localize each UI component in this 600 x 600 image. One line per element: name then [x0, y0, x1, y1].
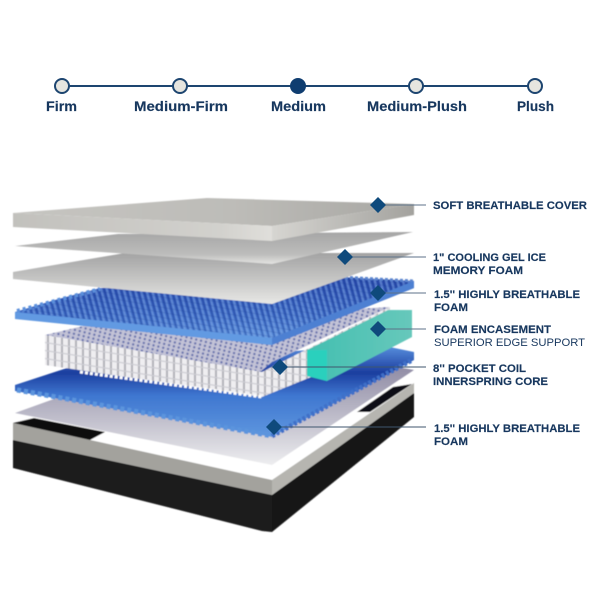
cover right side [272, 204, 414, 241]
label: foam encasement: SUPERIOR EDGE SUPPORT [434, 337, 585, 349]
base black side [13, 440, 272, 532]
label: pocket coil innerspring core: 8'' POCKET COIL [433, 363, 526, 375]
leader: breathable foam lower [266, 419, 426, 435]
sheet 2 [15, 232, 413, 264]
label: highly breathable foam lower: FOAM [434, 436, 468, 448]
upper foam left back teeth [17, 289, 100, 311]
leader: breathable foam upper [370, 285, 426, 301]
lower foam teeth right [272, 360, 412, 436]
label: foam encasement [434, 324, 585, 349]
upper blue foam [15, 277, 414, 345]
scale stop: Plush [528, 79, 542, 93]
upper foam surface [15, 277, 414, 345]
lower foam surface [15, 345, 414, 437]
pocket coil core [45, 307, 390, 397]
cover top [13, 198, 414, 226]
base black recess left [13, 418, 105, 441]
base gray band right side [272, 383, 414, 495]
scale stop: Firm [55, 79, 69, 93]
label: cooling gel ice memory foam: MEMORY FOAM [433, 265, 523, 277]
label: Medium-Plush: Medium-Plush [367, 99, 467, 114]
label: highly breathable foam upper [434, 289, 580, 314]
label: pocket coil innerspring core [433, 363, 548, 388]
label: cooling gel ice memory foam: 1" COOLING GEL ICE [433, 252, 546, 264]
foam encasement block [307, 310, 412, 381]
label: highly breathable foam upper: FOAM [434, 302, 468, 314]
base gray band [13, 423, 272, 495]
label: soft breathable cover: SOFT BREATHABLE COVER [433, 200, 587, 212]
label: highly breathable foam lower: 1.5'' HIGHLY BREATHABLE [434, 423, 580, 435]
leader: soft breathable cover [370, 197, 426, 213]
label: Firm: Firm [46, 99, 77, 114]
label: Medium: Medium [271, 99, 326, 114]
label: cooling gel ice memory foam [433, 252, 546, 277]
scale stop: Medium (selected) [290, 78, 306, 94]
label: Plush: Plush [517, 99, 554, 114]
firmness scale [46, 78, 554, 114]
upper foam front edge [15, 312, 272, 345]
leader: cooling gel [337, 249, 426, 265]
soft breathable cover [13, 198, 414, 241]
leader: foam encasement [370, 321, 426, 337]
label: pocket coil innerspring core: INNERSPRING CORE [433, 376, 548, 388]
scale line [62, 85, 535, 87]
lower foam teeth left [17, 390, 272, 436]
coil top [45, 307, 390, 372]
coil left side [45, 335, 262, 397]
cover front side [13, 213, 272, 241]
label: highly breathable foam lower [434, 423, 580, 448]
upper foam right back teeth [340, 277, 414, 281]
mattress layers illustration [13, 198, 414, 532]
lower blue foam [15, 345, 414, 437]
upper foam texture [20, 277, 414, 340]
under sheet [15, 360, 414, 465]
coil tooth edge [80, 372, 262, 397]
cooling gel memory foam [13, 232, 414, 304]
label: highly breathable foam upper: 1.5'' HIGHLY BREATHABLE [434, 289, 580, 301]
upper foam right edge [272, 281, 414, 345]
leader: pocket coil [272, 359, 426, 375]
mattress base [13, 378, 414, 532]
scale stop: Medium-Plush [409, 79, 423, 93]
label: foam encasement: FOAM ENCASEMENT [434, 324, 551, 336]
base top surface [13, 378, 414, 480]
label: Medium-Firm: Medium-Firm [134, 99, 228, 114]
scale stop: Medium-Firm [173, 79, 187, 93]
coil right side [262, 307, 390, 397]
sheet 3 [13, 253, 414, 304]
block end [307, 350, 327, 381]
base black recess right [357, 384, 412, 412]
block side [307, 310, 412, 381]
base black right side [272, 393, 414, 532]
